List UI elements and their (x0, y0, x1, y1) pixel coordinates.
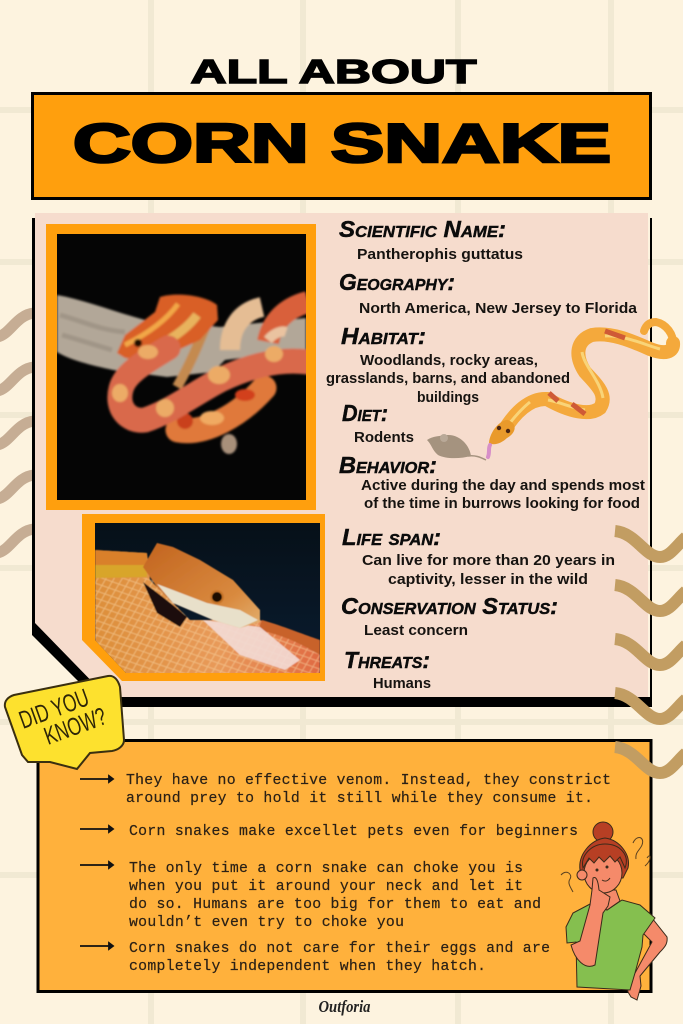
icon: thinking woman (561, 822, 667, 1000)
fact: diet (342, 400, 414, 446)
main coil (120, 348, 308, 420)
fact: threats: Threats: (344, 647, 430, 673)
fact text: choke: wouldn’t even try to choke you (129, 915, 404, 931)
title banner (32, 94, 650, 198)
fact: geography (339, 269, 638, 317)
fact: habitat: Habitat: (341, 323, 426, 349)
fact: geography: Geography: (339, 269, 455, 295)
fact: scientific name (339, 216, 523, 263)
branch (57, 295, 306, 377)
fact: diet: Rodents (354, 429, 414, 446)
decorative waves: left (0, 313, 34, 553)
neck (597, 890, 620, 910)
right arm (627, 918, 667, 1000)
body scales (95, 550, 320, 675)
panel: did you know facts (38, 740, 651, 992)
fact: life span (342, 524, 615, 588)
decorative waves: right (615, 531, 683, 773)
fact text: choke (129, 861, 541, 931)
face (584, 853, 622, 893)
shirt (566, 900, 655, 990)
fact: life span: captivity, lesser in the wild (388, 571, 588, 588)
fact: threats: Humans (373, 675, 431, 692)
question marks (561, 837, 650, 892)
icon: cartoon snake (488, 322, 673, 457)
fact text: venom: around prey to hold it still while they consume it. (126, 791, 593, 807)
fact: behavior (339, 452, 645, 512)
fact: life span: Can live for more than 20 years in (362, 552, 615, 569)
fact: behavior: Behavior: (339, 452, 437, 478)
fact text: venom (126, 773, 611, 807)
fact: diet: Diet: (342, 400, 388, 426)
fact: habitat: grasslands, barns, and abandoned (326, 370, 570, 387)
fact text: choke: do so. Humans are too big for them to eat and (129, 897, 541, 913)
fact: conservation status: Least concern (364, 622, 468, 639)
raised arm and hand (571, 878, 610, 966)
fringe (583, 844, 626, 868)
eyes and mouth (596, 869, 598, 871)
shadow under head (143, 582, 187, 627)
head and neck (117, 295, 218, 360)
icon: mouse (427, 434, 486, 460)
fact text: eggs: Corn snakes do not care for their eggs and are (129, 941, 550, 957)
fact text: eggs (129, 941, 550, 975)
fact: behavior: Active during the day and spends most (361, 477, 645, 494)
bun (593, 822, 613, 842)
fact: habitat: buildings (417, 389, 479, 406)
fact: scientific name: Pantherophis guttatus (357, 246, 523, 263)
callout: did you know: DID YOU (15, 684, 93, 735)
logo: outforia: Outforia (318, 997, 371, 1016)
callout: did you know: KNOW? (40, 702, 110, 751)
arrows (80, 776, 113, 949)
fact text: pets: Corn snakes make excellet pets even for beginners (129, 824, 578, 840)
fact: conservation status (341, 593, 558, 639)
fact: scientific name: Scientific Name: (339, 216, 506, 242)
photo: snake coiled on branch (46, 224, 316, 510)
fact text: choke: The only time a corn snake can choke you is (129, 861, 523, 877)
title banner: CORN SNAKE (73, 112, 611, 174)
head (143, 543, 260, 628)
callout: did you know (5, 676, 124, 769)
fact: geography: North America, New Jersey to Florida (359, 300, 638, 317)
photo: snake head close-up (82, 514, 325, 681)
fact: habitat (326, 323, 570, 406)
fact: conservation status: Conservation Status: (341, 593, 558, 619)
fact: behavior: of the time in burrows looking for food (364, 495, 640, 512)
hair back (580, 838, 628, 878)
panel: facts (32, 213, 652, 707)
fact: habitat: Woodlands, rocky areas, (360, 352, 538, 369)
fact text: choke: when you put it around your neck and let it (129, 879, 523, 895)
dangling tail (221, 434, 237, 454)
rear coils (177, 323, 207, 387)
fact text: venom: They have no effective venom. Instead, they constrict (126, 773, 611, 789)
fact: threats (344, 647, 431, 692)
fact text: eggs: completely independent when they hatch. (129, 959, 486, 975)
title: all about: ALL ABOUT (190, 53, 476, 90)
fact: life span: Life span: (342, 524, 441, 550)
